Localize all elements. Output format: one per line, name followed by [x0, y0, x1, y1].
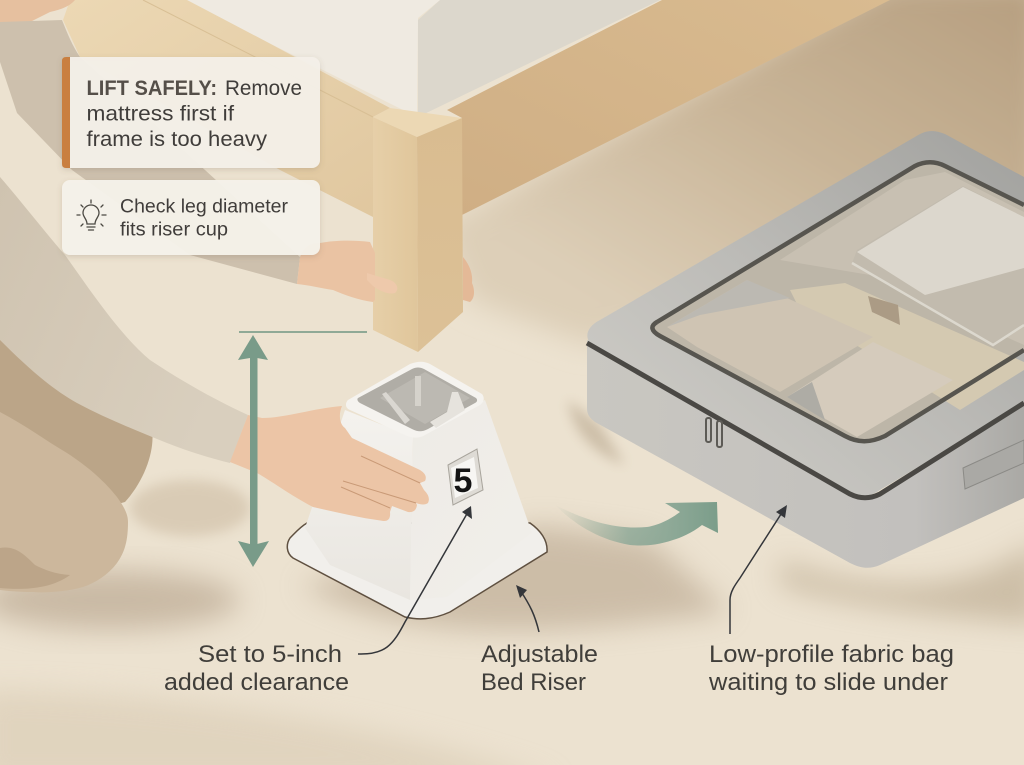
left knit textile	[667, 280, 873, 392]
label: set to 5-inch	[164, 641, 349, 696]
mattress	[187, 0, 660, 117]
person	[0, 0, 474, 592]
zipper line	[587, 343, 1024, 498]
striped textile	[790, 283, 1024, 410]
side handle	[963, 440, 1024, 489]
callout: lift safely	[62, 57, 320, 168]
callout: lift safely: mattress first if	[86, 102, 234, 126]
label: set to 5-inch: added clearance	[164, 669, 349, 696]
lower arm sleeve	[0, 177, 248, 463]
leader: clearance	[358, 506, 472, 654]
right knit textile	[787, 342, 953, 437]
callout: leg diameter tip: Check leg diameter	[120, 196, 289, 218]
slide-under arrow	[555, 502, 718, 545]
riser body left face	[305, 410, 413, 600]
label: adjustable bed riser: Bed Riser	[481, 669, 586, 696]
label: adjustable bed riser	[481, 641, 598, 696]
bag side panel	[587, 340, 1024, 568]
window frame	[652, 162, 1024, 441]
label: adjustable bed riser: Adjustable	[481, 641, 598, 668]
label: set to 5-inch: Set to 5-inch	[198, 641, 342, 668]
callout: leg diameter tip	[62, 180, 320, 255]
riser base	[287, 523, 547, 619]
callout: lift safely: frame is too heavy	[86, 127, 267, 151]
bag top panel	[587, 131, 1024, 496]
riser body right face	[410, 400, 532, 600]
leader: bag	[730, 505, 787, 634]
callout: leg diameter tip: fits riser cup	[120, 218, 228, 240]
callout: lift safely: Remove	[225, 76, 302, 100]
folded white stack	[852, 186, 1024, 345]
lower hand on riser	[230, 406, 429, 521]
front knee pants	[0, 412, 128, 592]
fabric storage bag	[587, 131, 1024, 568]
height arrow with guide line	[238, 332, 367, 567]
zipper pull	[706, 418, 722, 447]
riser cup	[346, 362, 484, 438]
window with folded textiles	[652, 162, 1024, 441]
leader: riser	[516, 585, 539, 632]
label: fabric bag	[708, 641, 954, 696]
bed leg	[373, 108, 463, 352]
label: fabric bag: waiting to slide under	[708, 669, 948, 696]
icon: light bulb	[77, 200, 106, 230]
chin and neck	[0, 0, 75, 22]
label: fabric bag: Low-profile fabric bag	[709, 641, 954, 668]
right side rail	[447, 0, 890, 215]
adjustable bed riser	[287, 362, 547, 619]
bed frame	[63, 0, 890, 217]
height dial showing 5: 5	[454, 462, 472, 500]
upper arm sleeve	[0, 20, 300, 284]
upper hand on leg	[297, 241, 474, 302]
callout: lift safely: LIFT SAFELY:	[86, 77, 217, 100]
back blanket	[780, 172, 1024, 345]
leader lines	[358, 505, 787, 654]
left side rail	[63, 0, 390, 217]
height dial showing 5	[448, 449, 483, 505]
rear pants	[0, 330, 153, 520]
